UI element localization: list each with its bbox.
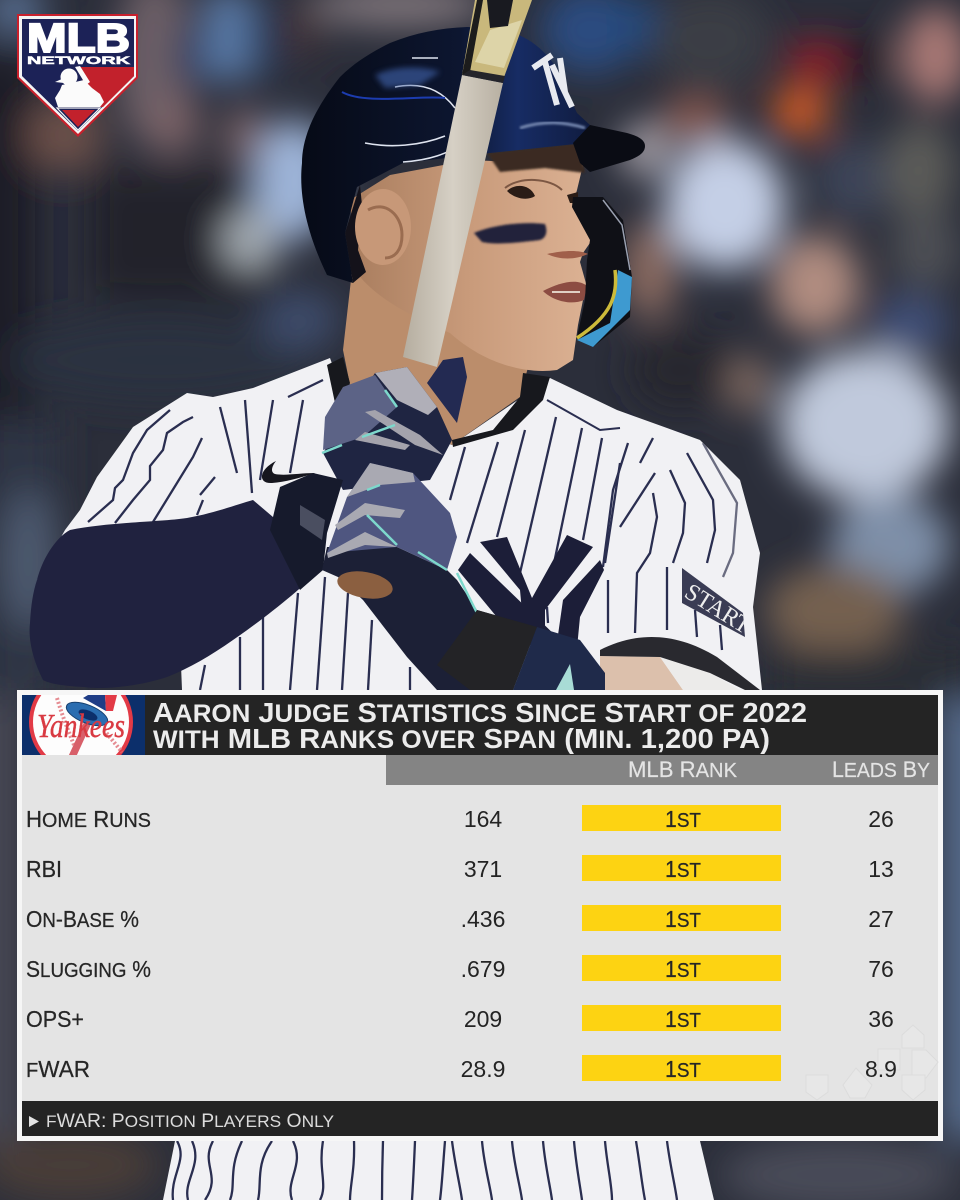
row: OPS+ [26, 1005, 894, 1032]
hair and brow shadow [487, 143, 585, 173]
row: fWAR: 1ST [665, 1056, 701, 1082]
row: RBI: 13 [868, 856, 894, 882]
lower glove [322, 463, 537, 690]
bat [403, 0, 532, 367]
nike swoosh [262, 461, 315, 483]
table frame and background [17, 690, 943, 1141]
hair behind ear [345, 185, 366, 283]
row: on-base percentage: ON-BASE % [26, 906, 139, 932]
row: fWAR: 8.9 [865, 1056, 897, 1082]
sleeve patch [682, 568, 745, 637]
panel: stats table [17, 670, 943, 1141]
armband and forearm [600, 637, 760, 690]
eyes [505, 180, 578, 203]
ear [355, 189, 411, 265]
sleeve patch: START [680, 579, 755, 640]
row: OPS+: OPS+ [26, 1006, 84, 1032]
team logo: Yankees [22, 695, 145, 755]
nose and lips [543, 251, 588, 302]
column headers: LEADS BY [832, 757, 930, 782]
row: RBI: 371 [464, 856, 502, 882]
navy arm sleeve [30, 487, 330, 688]
row: OPS+: 1ST [665, 1006, 701, 1032]
ear guard [572, 197, 632, 347]
collar [327, 357, 550, 447]
player photo illustration [30, 0, 762, 1200]
row: slugging percentage: 76 [868, 956, 894, 982]
row: home runs: 26 [868, 806, 894, 832]
jersey body [37, 358, 762, 1200]
row: slugging percentage: SLUGGING % [26, 956, 151, 982]
neck [343, 262, 530, 445]
row: RBI: RBI [26, 856, 62, 882]
face [350, 160, 592, 371]
heading: AARON JUDGE STATISTICS SINCE START OF 2022 [153, 697, 807, 728]
decorative corner texture [806, 1025, 938, 1100]
row: home runs: 164 [464, 806, 502, 832]
NETWORK lettering: NETWORK [27, 55, 130, 67]
footnote band: FWAR: POSITION PLAYERS ONLY [46, 1111, 334, 1132]
footnote band [22, 1101, 938, 1136]
helmet [301, 27, 645, 283]
batter silhouette [55, 66, 104, 107]
header band [22, 695, 938, 755]
row: home runs: HOME RUNS [26, 806, 151, 832]
row: fWAR [26, 1055, 897, 1082]
logo: MLB Network shield [17, 14, 138, 137]
MLB lettering: MLB [27, 15, 130, 61]
heading [153, 697, 807, 754]
row: slugging percentage: 1ST [665, 956, 701, 982]
column headers: MLB RANK [628, 757, 738, 782]
row: RBI: 1ST [665, 856, 701, 882]
row: RBI [26, 855, 894, 882]
row: on-base percentage: .436 [461, 906, 505, 932]
heading: WITH MLB RANKS OVER SPAN (MIN. 1,200 PA) [153, 723, 770, 754]
helmet NY logo [533, 55, 572, 107]
bat knob [335, 567, 395, 603]
pinstripes [88, 380, 737, 1200]
glove cuff [513, 627, 605, 690]
wrist wrap [437, 610, 537, 690]
row: fWAR: FWAR [26, 1056, 90, 1082]
row: OPS+: 209 [464, 1006, 502, 1032]
row: slugging percentage [26, 955, 894, 982]
row: on-base percentage: 1ST [665, 906, 701, 932]
column headers [386, 755, 938, 785]
helmet bill [573, 125, 645, 172]
eye black [474, 223, 546, 243]
row: slugging percentage: .679 [461, 956, 505, 982]
row: on-base percentage [26, 905, 894, 932]
team logo: Yankees: Yankees [37, 708, 125, 745]
upper glove [270, 357, 467, 590]
row: home runs: 1ST [665, 806, 701, 832]
row: home runs [26, 805, 894, 832]
row: on-base percentage: 27 [868, 906, 894, 932]
row: fWAR: 28.9 [461, 1056, 505, 1082]
NY chest logo [458, 535, 604, 648]
row: OPS+: 36 [868, 1006, 894, 1032]
